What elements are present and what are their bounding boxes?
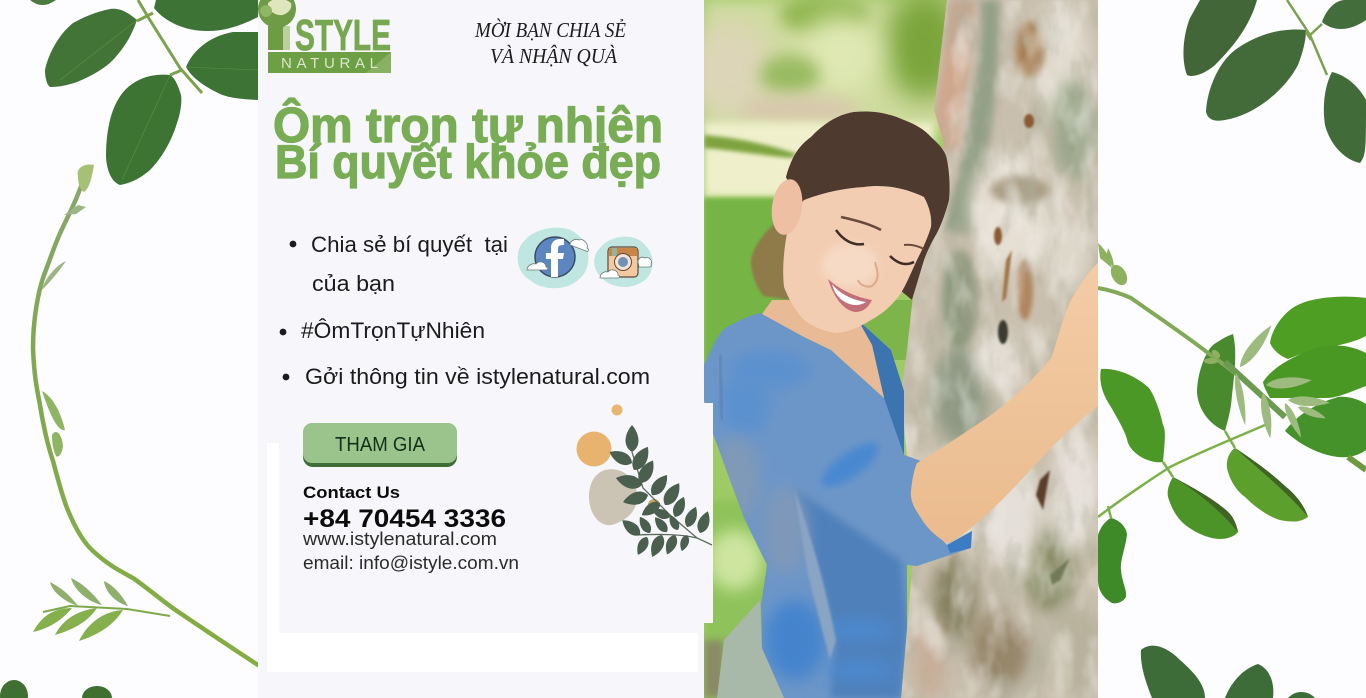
title: Bí quyết khỏe đẹp [275, 135, 661, 188]
contact details [302, 483, 519, 573]
tagline: VÀ NHẬN QUÀ [490, 44, 617, 68]
girl: neck [762, 300, 884, 398]
contact details: www.istylenatural.com [302, 529, 497, 549]
foliage: right top leaves [1183, 0, 1366, 163]
girl: face [768, 177, 931, 333]
bullet list: của bạn [312, 271, 395, 296]
foliage: left top leaves [30, 0, 258, 185]
bullet list [280, 232, 650, 389]
girl: ponytail [750, 224, 790, 300]
girl: hair [786, 111, 950, 300]
foliage: right middle branch [1098, 243, 1366, 603]
bullet list: Chia sẻ bí quyết tại [311, 232, 508, 257]
tagline [474, 18, 626, 68]
girl: blue shirt [704, 310, 974, 698]
contact details: +84 70454 3336 [303, 505, 506, 533]
foliage: left vine [33, 165, 258, 665]
button: tham gia: THAM GIA [335, 434, 426, 456]
logo: iStyle Natural [258, 0, 391, 73]
title: Ôm trọn tự nhiên [273, 98, 663, 153]
foliage: right bottom leaves [1141, 646, 1315, 698]
logo: iStyle Natural: STYLE [295, 11, 391, 60]
photo background: park [704, 0, 947, 698]
photo: girl hugging a tree [685, 0, 1099, 698]
icon: instagram [594, 237, 653, 287]
tagline: MỜI BẠN CHIA SẺ [474, 18, 626, 42]
logo: iStyle Natural: NATURAL [281, 55, 378, 72]
foliage: left bottom leaves [0, 680, 112, 698]
foliage: left sprig [33, 578, 170, 641]
panel: central card [258, 0, 704, 698]
decoration: circles and leaf branch [576, 404, 713, 559]
girl: arm [911, 263, 1098, 543]
bullet list: Gởi thông tin về istylenatural.com [305, 364, 650, 389]
bullet list: #ÔmTrọnTựNhiên [301, 318, 485, 343]
title [273, 98, 663, 188]
panel extension strip [704, 403, 713, 623]
contact details: Contact Us [303, 483, 400, 502]
contact details: email: info@istyle.com.vn [303, 553, 519, 573]
button: tham gia [303, 423, 457, 467]
girl: jeans [717, 600, 790, 698]
tree trunk [890, 0, 1099, 698]
icon: facebook [518, 228, 589, 288]
